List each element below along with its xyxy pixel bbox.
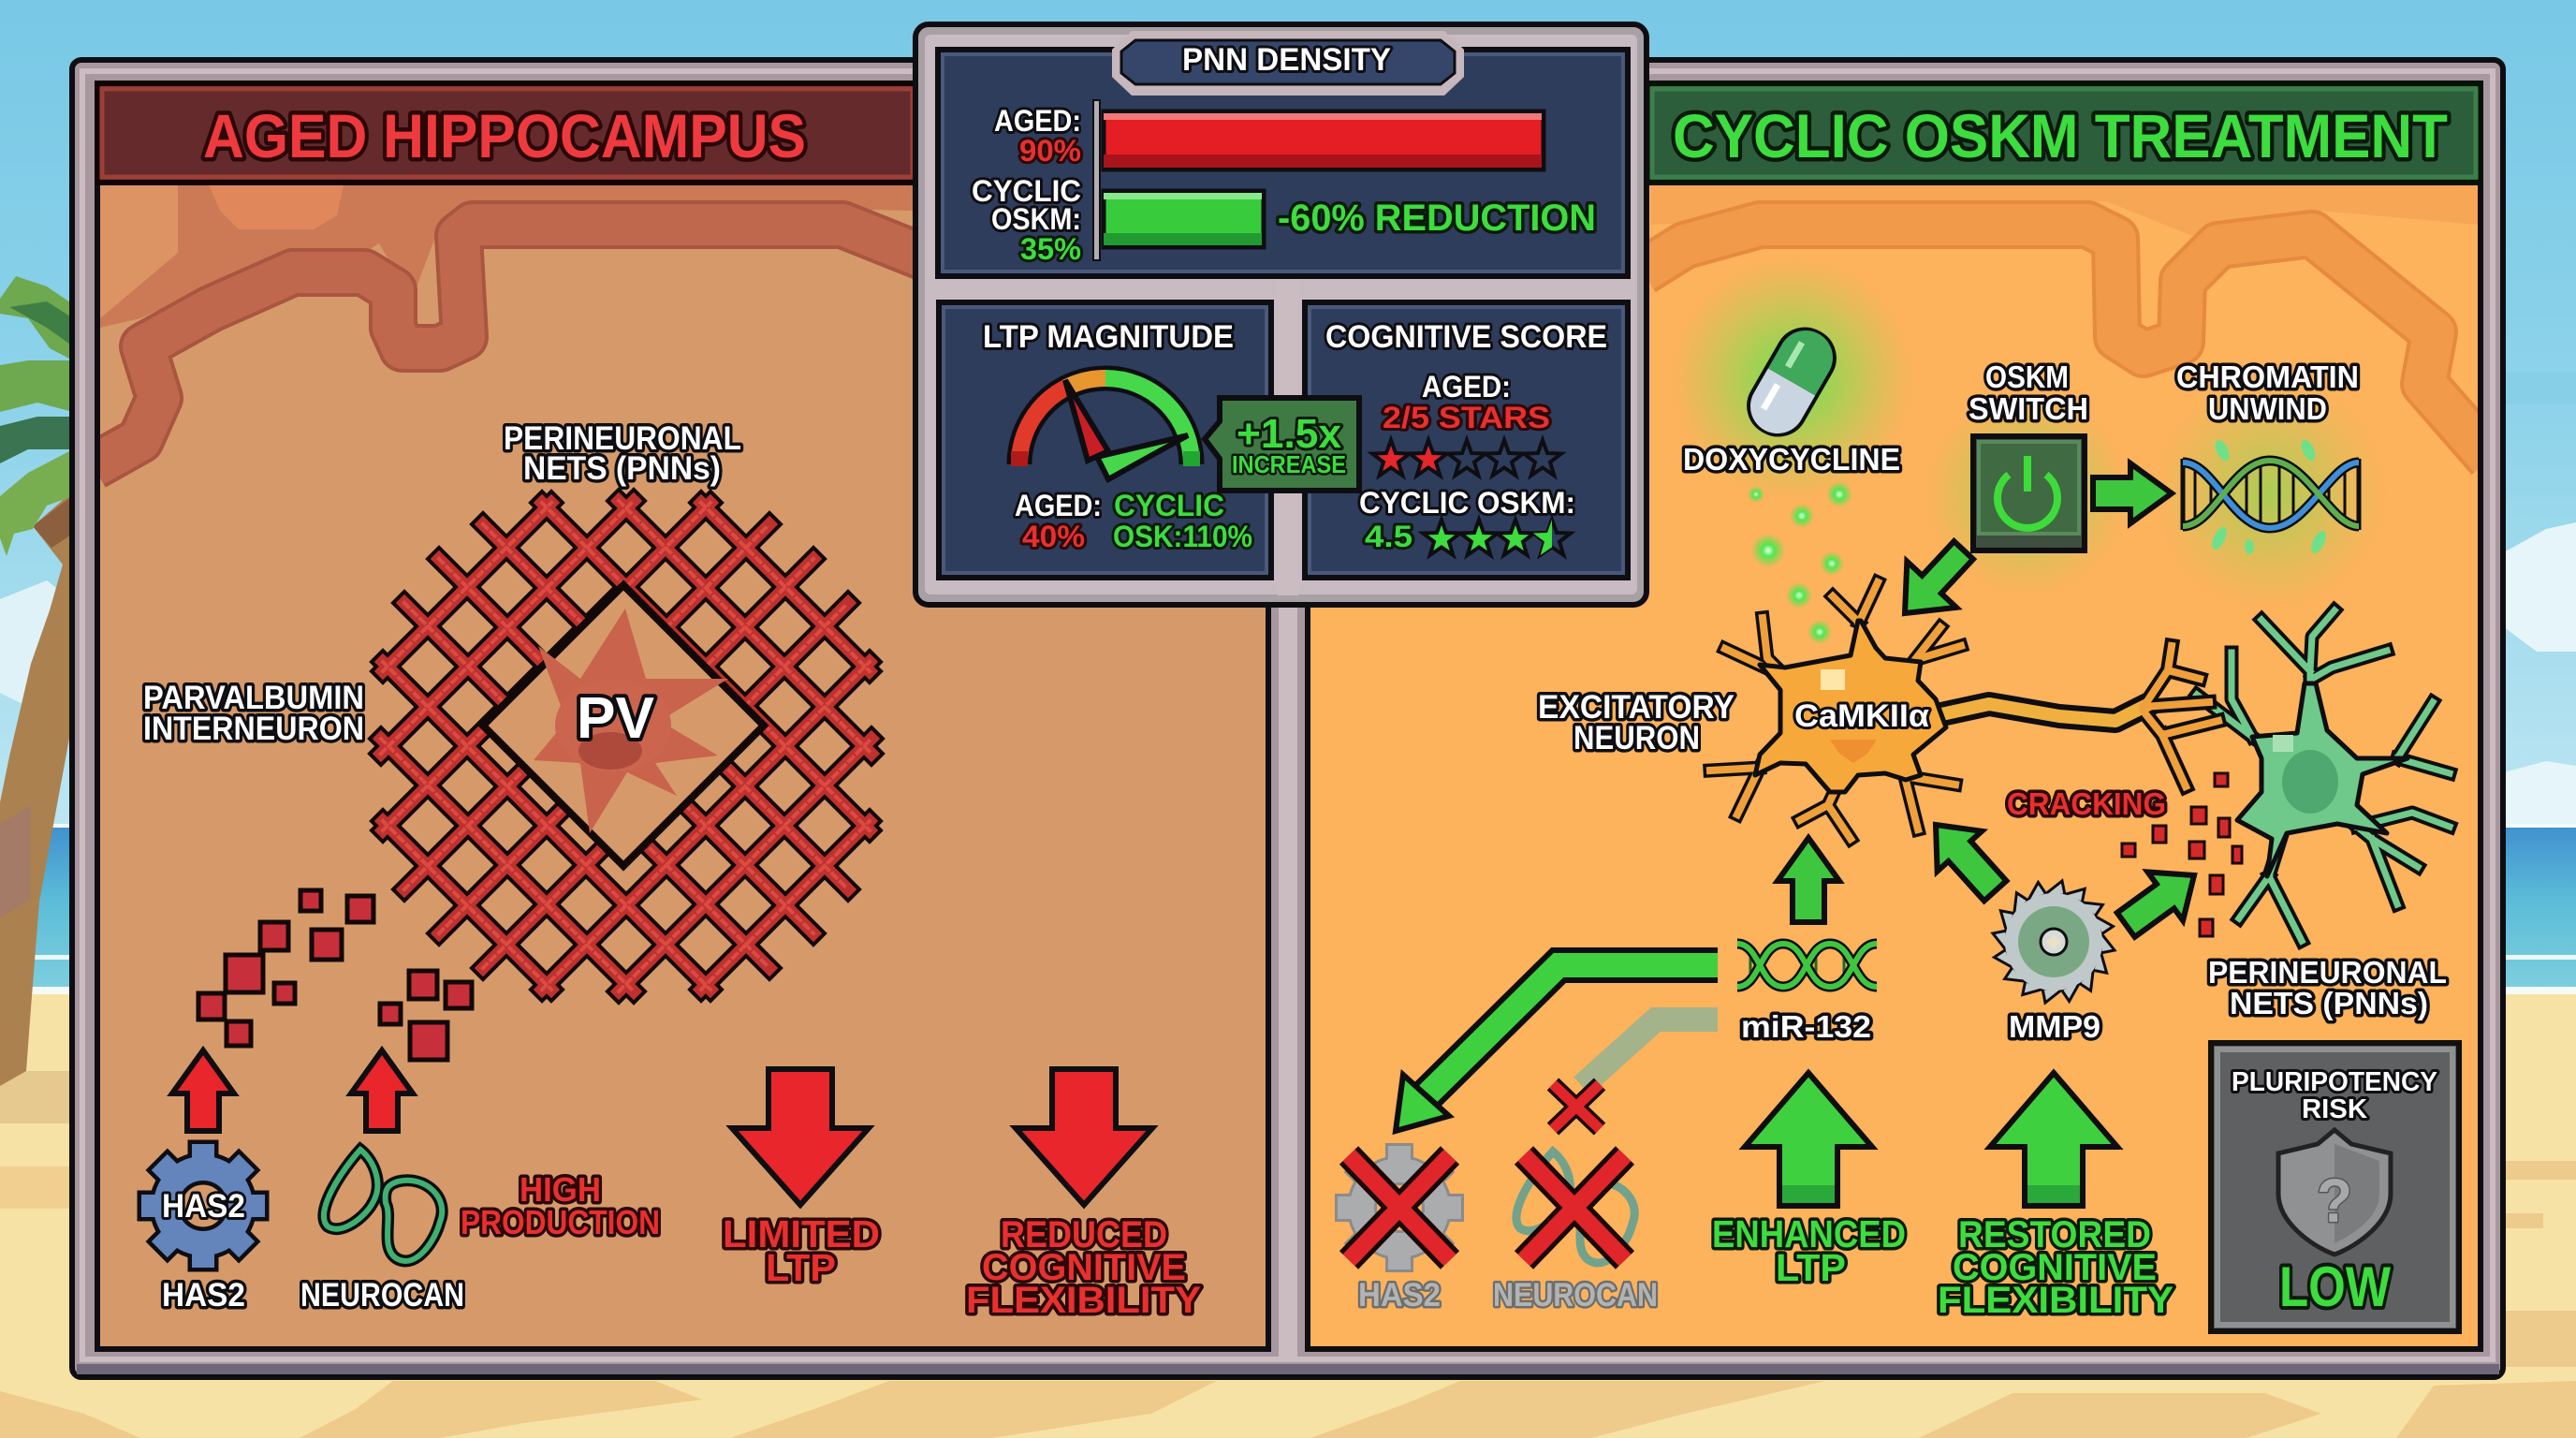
arrow: switch to chromatin <box>2093 463 2172 523</box>
label: perineuronal nets right: NETS (PNNs) <box>2230 986 2428 1020</box>
label: chromatin unwind: CHROMATIN <box>2176 360 2359 394</box>
parvalbumin neuron soma <box>483 585 764 866</box>
perineuronal net lattice <box>381 501 871 991</box>
label: perineuronal nets: PERINEURONAL <box>504 420 741 457</box>
panel body <box>97 180 1268 1349</box>
callout: 1.5x increase: +1.5x <box>1237 411 1342 457</box>
label: high production <box>461 1170 660 1241</box>
label: parvalbumin interneuron: PARVALBUMIN <box>143 680 364 716</box>
label: perineuronal nets: NETS (PNNs) <box>523 450 721 487</box>
icon: neurocan squiggle <box>324 1150 442 1261</box>
labels: cyclic ltp: CYCLIC <box>1114 489 1224 522</box>
label: high production: HIGH <box>520 1170 601 1209</box>
label: oskm switch: OSKM <box>1985 360 2069 394</box>
orange excitatory neuron: CaMKIIα <box>1794 698 1929 734</box>
panel: central stats <box>915 24 1647 605</box>
label: limited ltp: LIMITED <box>723 1212 880 1255</box>
label: oskm switch: SWITCH <box>1969 391 2088 426</box>
arrow: switch to neuron <box>1881 527 1988 637</box>
panel: cognitive score: COGNITIVE SCORE <box>1325 319 1607 355</box>
icon: mir-132 helix <box>1737 944 1877 987</box>
faded inhibition arrow to neurocan <box>1582 1020 1718 1086</box>
labels: cyclic density: CYCLIC <box>972 174 1081 208</box>
label: reduced cognitive flexibility <box>966 1214 1201 1321</box>
stats frame <box>915 24 1647 605</box>
arrow: has2 up <box>172 1050 234 1131</box>
header: cyclic oskm treatment <box>1647 83 2481 183</box>
label: cyclic score <box>1359 486 1575 553</box>
label: perineuronal nets right: PERINEURONAL <box>2208 955 2447 990</box>
stars: aged <box>1372 440 1561 476</box>
arrow: neurocan up <box>351 1050 413 1131</box>
labels: aged ltp: 40% <box>1022 520 1085 553</box>
panel: pluripotency risk <box>2211 1043 2459 1331</box>
label: enhanced ltp: LTP <box>1776 1246 1846 1289</box>
label: chromatin unwind <box>2176 360 2359 426</box>
label: aged score: AGED: <box>1422 370 1511 404</box>
palm tree <box>0 276 73 1086</box>
label: aged score: 2/5 STARS <box>1383 401 1550 434</box>
arrow: mir-132 to neuron <box>1778 838 1839 922</box>
panel: cyclic oskm treatment <box>1308 83 2490 1349</box>
green target neuron <box>2197 610 2450 941</box>
label: restored cognitive flexibility: COGNITIVE <box>1953 1247 2157 1288</box>
label: parvalbumin interneuron: INTERNEURON <box>143 711 364 747</box>
arrow: limited ltp down <box>732 1069 869 1205</box>
sand stripes <box>0 1381 2576 1438</box>
orange excitatory neuron <box>1710 582 2218 839</box>
label: high production: PRODUCTION <box>461 1203 660 1241</box>
label: perineuronal nets <box>504 420 741 487</box>
icon: power switch <box>1973 436 2085 550</box>
label: cyclic score: 4.5 <box>1365 520 1412 553</box>
labels: cyclic ltp <box>1113 489 1252 553</box>
icon: inhibited neurocan <box>1516 1152 1634 1263</box>
panel: pnn density <box>938 36 1628 276</box>
label: doxycycline: DOXYCYCLINE <box>1683 442 1900 477</box>
gauge <box>1011 378 1200 479</box>
label: mir-132: miR-132 <box>1741 1009 1871 1044</box>
needle: aged <box>1065 380 1108 461</box>
label: cyclic score: CYCLIC OSKM: <box>1359 486 1575 520</box>
anatomy: hippocampus band <box>94 184 936 466</box>
callout: 1.5x increase <box>1205 398 1359 491</box>
labels: aged ltp: AGED: <box>1015 489 1102 522</box>
label: oskm switch <box>1969 360 2088 426</box>
header: aged hippocampus: AGED HIPPOCAMPUS <box>203 101 806 170</box>
anatomy: hippocampus band <box>1643 184 2490 459</box>
label: reduced cognitive flexibility: COGNITIVE <box>982 1247 1186 1288</box>
label: excitatory neuron <box>1538 689 1734 756</box>
panel: pluripotency risk: RISK <box>2302 1094 2367 1124</box>
arrow: enhanced ltp up <box>1745 1073 1872 1206</box>
label: chromatin unwind: UNWIND <box>2208 391 2327 426</box>
needle: cyclic <box>1097 435 1188 479</box>
glow: switch and chromatin <box>1671 257 2387 610</box>
long green inhibition arrow to has2 <box>1396 965 1718 1131</box>
label: cracking: CRACKING <box>2007 786 2166 821</box>
label: restored cognitive flexibility <box>1938 1214 2174 1321</box>
header: cyclic oskm treatment: CYCLIC OSKM TREATMENT <box>1673 101 2448 170</box>
label: has2: HAS2 <box>162 1277 245 1313</box>
label: neurocan grey: NEUROCAN <box>1493 1277 1658 1313</box>
chart axis <box>1093 100 1100 260</box>
labels: aged density <box>994 104 1081 168</box>
label: enhanced ltp: ENHANCED <box>1712 1212 1906 1255</box>
labels: cyclic density: OSKM: <box>991 202 1081 236</box>
icon: shield with question mark <box>2278 1130 2391 1255</box>
title tab <box>1117 36 1459 91</box>
header: aged hippocampus <box>97 83 916 183</box>
panel: pluripotency risk: LOW <box>2279 1255 2391 1318</box>
label: parvalbumin interneuron <box>143 680 364 747</box>
label: excitatory neuron: NEURON <box>1573 720 1700 756</box>
panel: cognitive score <box>1305 302 1628 578</box>
label: limited ltp <box>723 1212 880 1289</box>
label: reduced cognitive flexibility: REDUCED <box>1001 1214 1167 1255</box>
cracked net fragments <box>2122 773 2242 936</box>
secreted matrix fragments <box>198 890 472 1060</box>
title tab: PNN DENSITY <box>1182 42 1391 78</box>
labels: cyclic density <box>972 174 1081 266</box>
label: limited ltp: LTP <box>766 1246 836 1289</box>
label: mmp9: MMP9 <box>2009 1009 2100 1044</box>
labels: cyclic ltp: OSK:110% <box>1113 520 1252 553</box>
icon: shield with question mark: ? <box>2317 1166 2352 1235</box>
callout: 1.5x increase: INCREASE <box>1232 450 1346 478</box>
label: restored cognitive flexibility: RESTORED <box>1958 1214 2151 1255</box>
panel: ltp magnitude: LTP MAGNITUDE <box>983 319 1234 355</box>
label: restored cognitive flexibility: FLEXIBILITY <box>1938 1280 2174 1321</box>
parvalbumin neuron soma: PV <box>577 686 654 751</box>
panel: ltp magnitude <box>939 302 1271 578</box>
labels: aged density: 90% <box>1019 134 1081 168</box>
label: enhanced ltp <box>1712 1212 1906 1289</box>
glowing drug particles <box>1748 481 1852 644</box>
panel: aged hippocampus <box>94 83 1268 1349</box>
label: reduction: -60% REDUCTION <box>1278 198 1596 239</box>
labels: aged density: AGED: <box>994 104 1081 138</box>
icon: doxycycline pill <box>1740 320 1843 444</box>
icon: small red x <box>1553 1084 1600 1129</box>
labels: cyclic density: 35% <box>1020 232 1081 266</box>
label: has2 grey: HAS2 <box>1358 1277 1441 1313</box>
bar: cyclic 35% <box>1104 191 1264 247</box>
label: reduced cognitive flexibility: FLEXIBILITY <box>966 1280 1201 1321</box>
label: aged score <box>1383 370 1550 434</box>
icon: has2 gear: HAS2 <box>162 1188 245 1225</box>
label: perineuronal nets right <box>2208 955 2447 1020</box>
labels: aged ltp <box>1015 489 1102 553</box>
panel: pluripotency risk: PLURIPOTENCY <box>2232 1067 2437 1097</box>
label: neurocan: NEUROCAN <box>300 1277 464 1313</box>
label: excitatory neuron: EXCITATORY <box>1538 689 1734 726</box>
arrow: mmp9 to nets <box>2108 851 2212 949</box>
arrow: restored flexibility up <box>1990 1073 2117 1206</box>
stars: cyclic <box>1423 520 1571 555</box>
icon: inhibited has2 gear <box>1338 1146 1461 1269</box>
arrow: reduced flexibility down <box>1016 1069 1152 1205</box>
bar: aged 90% <box>1104 111 1544 169</box>
panel body <box>1308 180 2481 1349</box>
icon: has2 gear <box>141 1144 265 1268</box>
icon: dna helix <box>2183 438 2359 555</box>
arrow: mmp9 to neuron <box>1913 805 2017 911</box>
icon: mmp9 saw blade <box>1993 881 2115 1003</box>
